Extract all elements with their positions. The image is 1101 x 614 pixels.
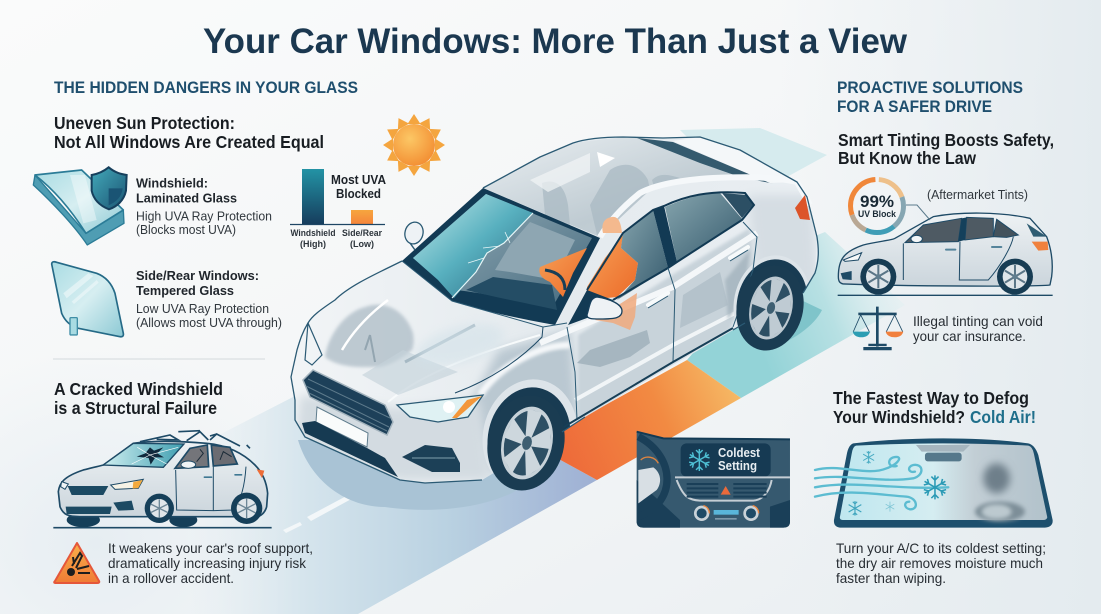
- text: tempered glass: Side/Rear Windows:: [136, 268, 259, 283]
- text: tempered glass: Tempered Glass: [136, 283, 234, 298]
- text: defog explanation: [836, 540, 1046, 586]
- heading: fastest way to defog: Cold Air!: [970, 407, 1036, 427]
- illustration: tinted hatchback: [838, 213, 1053, 295]
- icon: warning triangle: [54, 543, 99, 583]
- text: roof support warning: It weakens your car's roof support,: [108, 540, 313, 556]
- section heading: proactive solutions: FOR A SAFER DRIVE: [837, 98, 992, 116]
- road band behind the car: [180, 128, 905, 614]
- side windows: [587, 192, 754, 300]
- text: illegal tinting: your car insurance.: [913, 328, 1026, 344]
- text: illegal tinting: Illegal tinting can void: [913, 313, 1043, 329]
- heading: fastest way to defog: Your Windshield?: [833, 407, 965, 427]
- bar chart: UVA blocked: (High): [300, 239, 326, 249]
- donut: 99% UV block: 99%: [860, 192, 894, 211]
- text: illegal tinting: [913, 313, 1043, 344]
- label: aftermarket tints: (Aftermarket Tints): [927, 187, 1028, 202]
- bar chart: UVA blocked: Most UVA: [331, 173, 386, 187]
- text: defog explanation: the dry air removes moisture much: [836, 555, 1043, 571]
- heading: smart tinting: [838, 130, 1054, 168]
- orange occupant: [539, 217, 638, 300]
- text: tempered glass: (Allows most UVA through): [136, 315, 282, 330]
- transparent roof with seats: [483, 137, 810, 237]
- windshield and interior seen through crack: [402, 188, 600, 325]
- divider: [53, 358, 265, 360]
- door seams, handles and sill: [305, 222, 757, 428]
- text: tempered glass: [136, 268, 282, 330]
- bar chart: UVA blocked: Side/Rear: [342, 228, 382, 238]
- label: coldest setting: Setting: [718, 458, 757, 473]
- car outline: [291, 137, 818, 483]
- text: laminated glass: Laminated Glass: [136, 190, 237, 206]
- label: coldest setting: Coldest: [718, 445, 761, 460]
- heading: cracked windshield: A Cracked Windshield: [54, 379, 223, 399]
- text: laminated glass: High UVA Ray Protection: [136, 208, 272, 224]
- donut: 99% UV block: [850, 180, 904, 232]
- icon: laminated windshield with shield: [33, 167, 127, 245]
- rear wheel: [728, 258, 812, 358]
- icon: scales of justice: [853, 307, 903, 349]
- text: defog explanation: Turn your A/C to its coldest setting;: [836, 540, 1046, 556]
- illustration: main car with transparent body: [291, 137, 822, 510]
- text: laminated glass: Windshield:: [136, 176, 208, 190]
- text: tempered glass: Low UVA Ray Protection: [136, 301, 269, 316]
- bar chart: UVA blocked: Windshield: [290, 228, 336, 238]
- heading: fastest way to defog: [833, 388, 1036, 427]
- body shading: [296, 195, 819, 502]
- car ground shadow: [298, 440, 560, 510]
- text: roof support warning: in a rollover accident.: [108, 570, 234, 586]
- mirrors: [402, 220, 622, 325]
- heading: fastest way to defog: The Fastest Way to Defog: [833, 388, 1029, 408]
- heading: uneven sun protection: Not All Windows Are Created Equal: [54, 132, 324, 152]
- text: roof support warning: [108, 540, 313, 586]
- illustration: hatchback with cracked windshield: [53, 431, 272, 528]
- heading: smart tinting: Smart Tinting Boosts Safety,: [838, 130, 1054, 150]
- wheel arches: [482, 379, 576, 474]
- heading: cracked windshield: is a Structural Failure: [54, 398, 217, 418]
- callout leader line: [906, 205, 930, 220]
- label: coldest setting: [718, 445, 761, 473]
- heading: uneven sun protection: Uneven Sun Protection:: [54, 113, 235, 133]
- text: laminated glass: (Blocks most UVA): [136, 222, 236, 237]
- car body: [291, 137, 818, 483]
- donut: 99% UV block: UV Block: [858, 209, 897, 220]
- section heading: proactive solutions: [837, 79, 1023, 116]
- illustration: foggy windshield with cold air: [815, 438, 1053, 528]
- bar chart: UVA blocked: Blocked: [336, 187, 381, 201]
- title: Your Car Windows: More Than Just a View: [203, 22, 908, 61]
- section heading: proactive solutions: PROACTIVE SOLUTIONS: [837, 79, 1023, 97]
- front wheel: [478, 387, 574, 499]
- section heading: hidden dangers: THE HIDDEN DANGERS IN YOUR GLASS: [54, 79, 358, 97]
- text: laminated glass: [136, 176, 272, 237]
- front end: grille, plate, intake: [302, 195, 810, 477]
- bar chart: UVA blocked: [290, 169, 386, 249]
- heading: uneven sun protection: [54, 113, 324, 152]
- text: defog explanation: faster than wiping.: [836, 570, 946, 586]
- engine seen through hood: [325, 300, 508, 395]
- icon: sun: [383, 114, 445, 176]
- bar chart: UVA blocked: (Low): [350, 239, 374, 249]
- text: roof support warning: dramatically increasing injury risk: [108, 555, 307, 571]
- heading: cracked windshield: [54, 379, 223, 418]
- heading: smart tinting: But Know the Law: [838, 148, 976, 168]
- icon: side window glass: [52, 262, 123, 337]
- illustration: dashboard with coldest setting: [637, 432, 790, 528]
